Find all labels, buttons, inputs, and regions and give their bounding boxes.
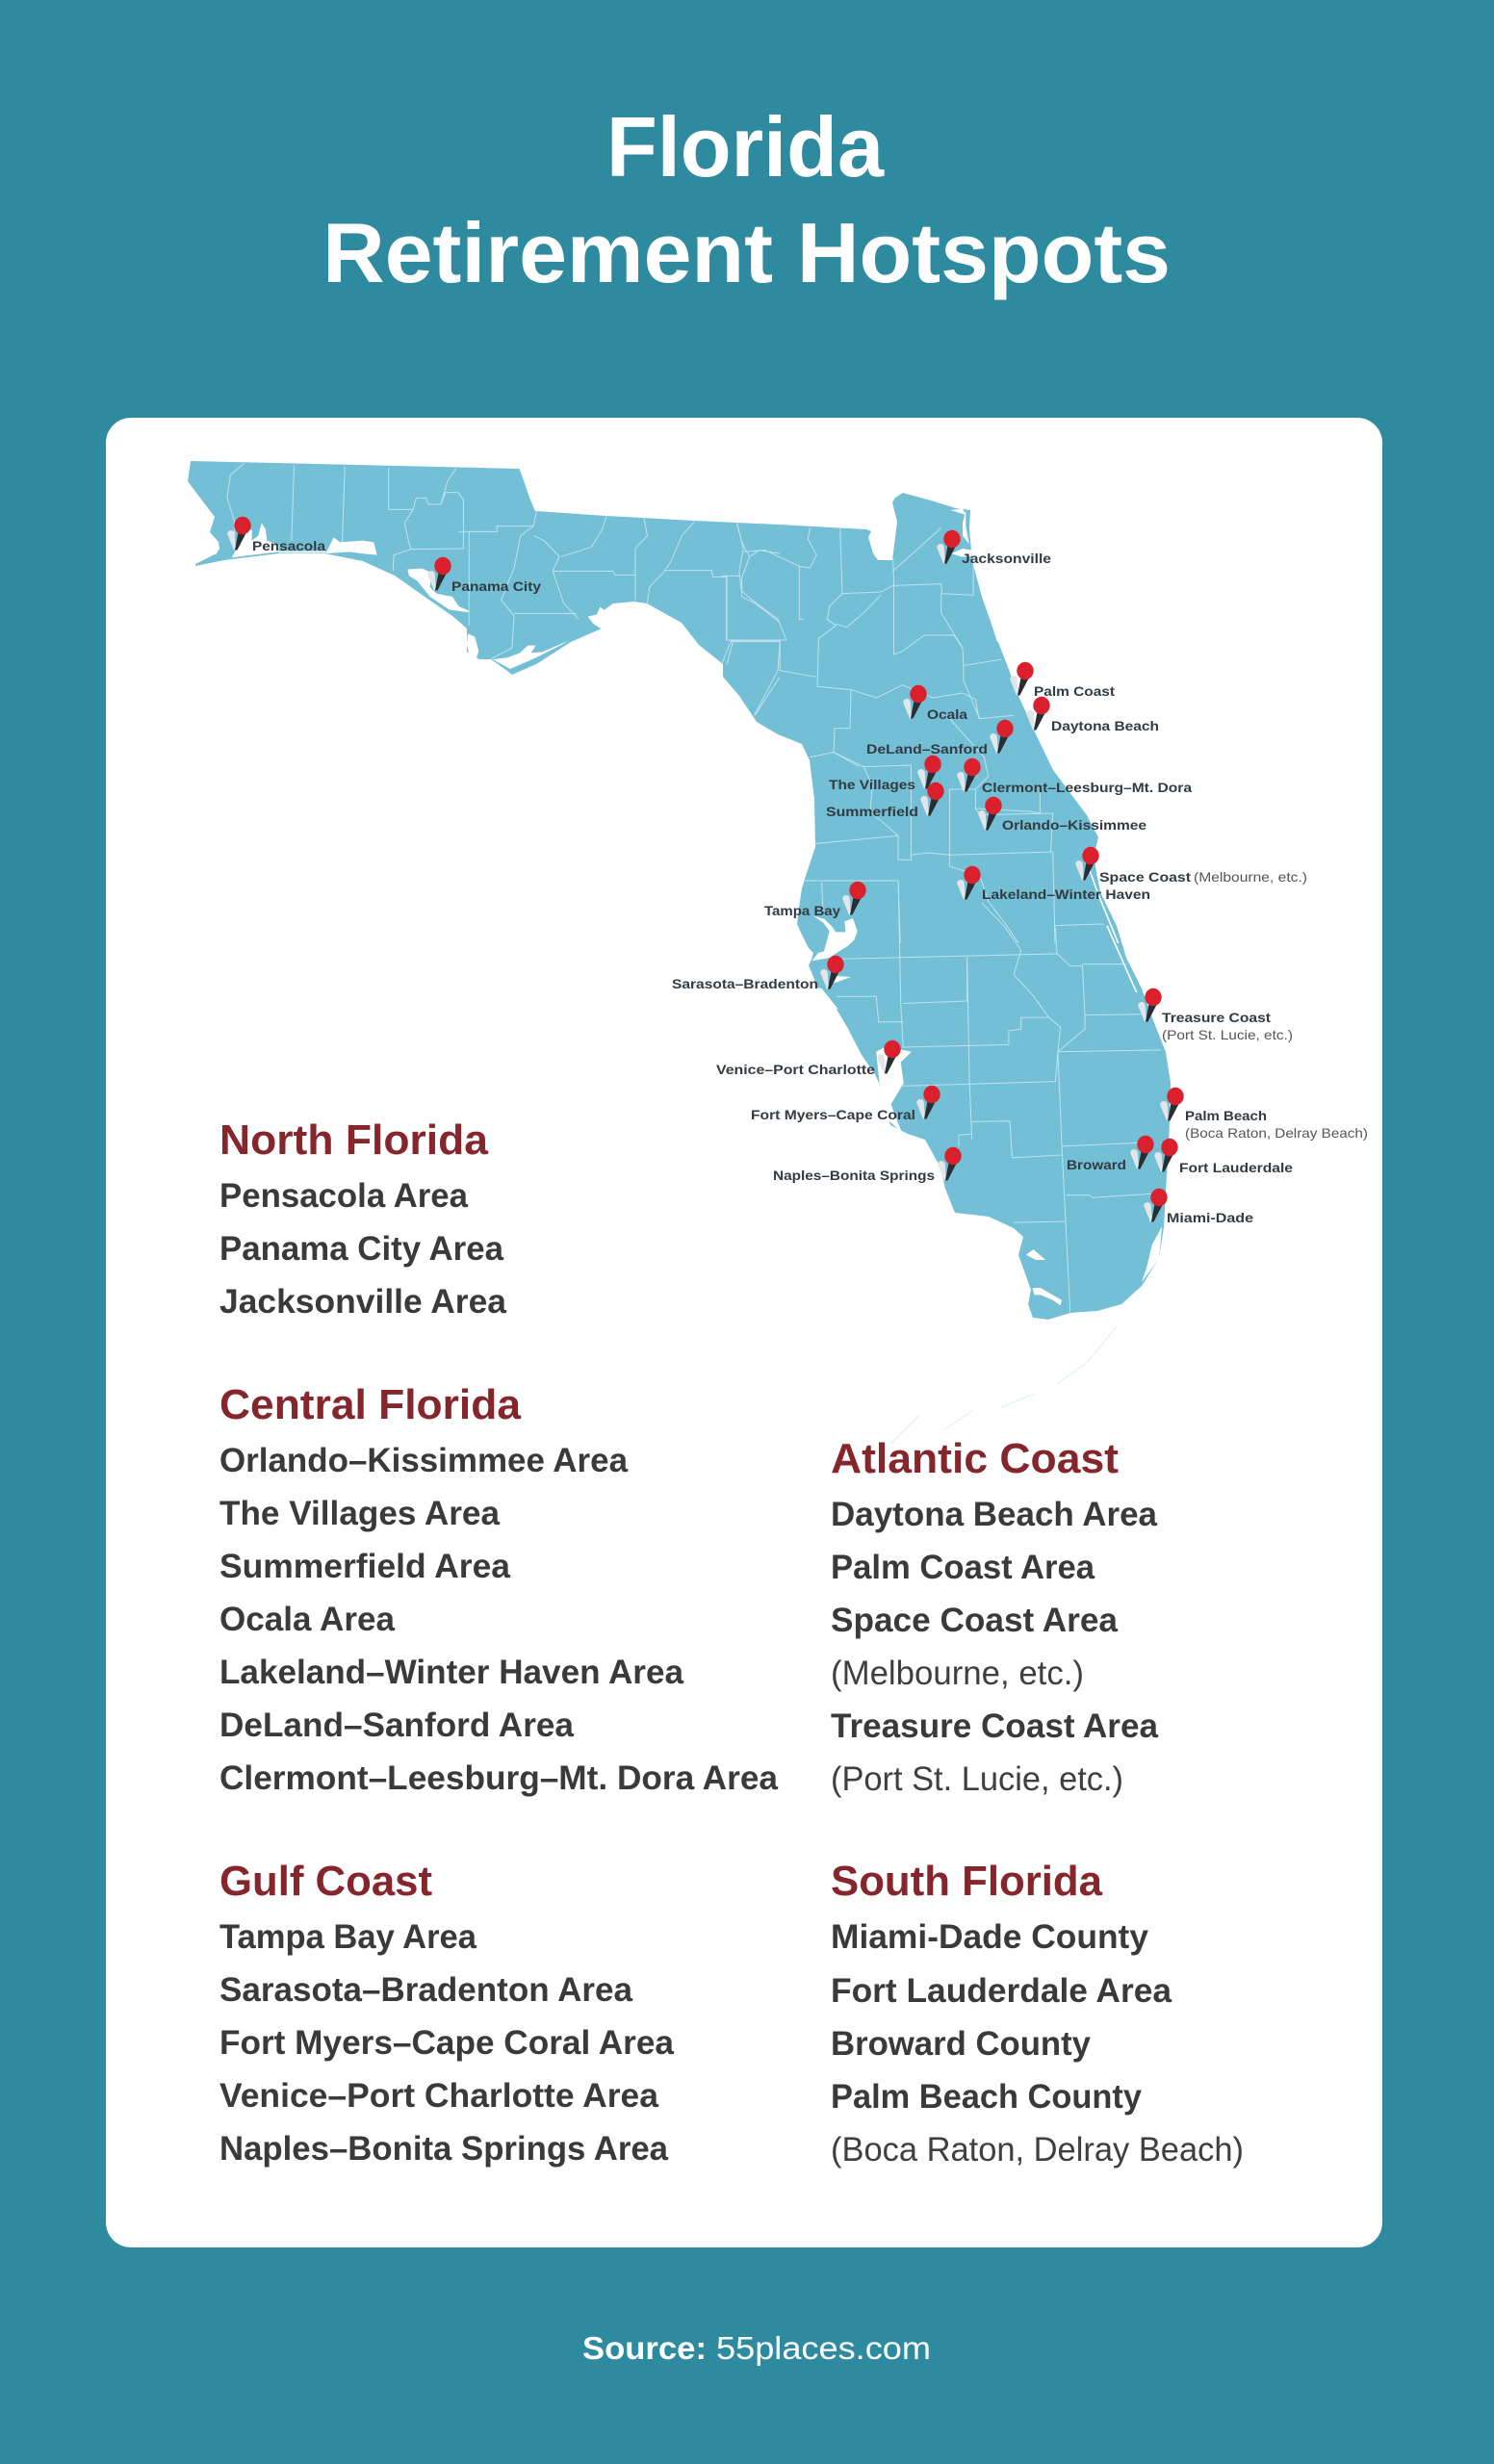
list: Central Florida: DeLand–Sanford Area [219, 1707, 575, 1744]
list: South Florida: Fort Lauderdale Area [831, 1972, 1172, 2010]
list: Atlantic Coast: Palm Coast Area [831, 1549, 1095, 1586]
list: North Florida: Pensacola Area [219, 1177, 469, 1215]
map land outline [188, 461, 1171, 1320]
map labels: (Boca Raton, Delray Beach) [1185, 1125, 1368, 1141]
map labels: Tampa Bay [764, 903, 840, 918]
map labels: Sarasota–Bradenton [672, 976, 818, 991]
list: Gulf Coast: Fort Myers–Cape Coral Area [219, 2024, 675, 2062]
map labels: Broward [1067, 1157, 1126, 1172]
list: North Florida: Jacksonville Area [219, 1283, 507, 1321]
source footer: 55places.com [716, 2330, 931, 2366]
list: Atlantic Coast: Atlantic Coast [831, 1435, 1119, 1482]
map labels [252, 538, 1368, 1225]
map labels: Ocala [927, 706, 967, 722]
title: Retirement Hotspots [322, 205, 1171, 300]
list: Gulf Coast: Naples–Bonita Springs Area [219, 2130, 669, 2168]
list: Atlantic Coast: Daytona Beach Area [831, 1496, 1158, 1533]
map labels: Treasure Coast [1162, 1010, 1271, 1025]
list: South Florida: Palm Beach County [831, 2078, 1143, 2116]
map labels: Clermont–Leesburg–Mt. Dora [982, 780, 1192, 795]
list: Central Florida: Summerfield Area [219, 1548, 511, 1585]
map labels: Pensacola [252, 538, 325, 553]
map labels: Fort Lauderdale [1179, 1160, 1293, 1175]
list: South Florida: Miami-Dade County [831, 1918, 1149, 1956]
title: Florida [606, 99, 885, 194]
list: South Florida: (Boca Raton, Delray Beach) [831, 2131, 1244, 2169]
map labels: Orlando–Kissimmee [1002, 817, 1146, 833]
source footer: Source: [582, 2330, 707, 2366]
title [322, 99, 1171, 300]
list: South Florida: South Florida [831, 1858, 1103, 1905]
map labels: Space Coast [1099, 869, 1191, 885]
map labels: Lakeland–Winter Haven [982, 886, 1150, 902]
map labels: Summerfield [826, 804, 918, 819]
list: Central Florida: Central Florida [219, 1381, 522, 1428]
bay: Tampa [811, 916, 858, 1009]
list: Gulf Coast: Gulf Coast [219, 1858, 432, 1905]
map labels: Palm Beach [1185, 1108, 1267, 1123]
list: Atlantic Coast [831, 1435, 1159, 1798]
list: North Florida [219, 1116, 507, 1321]
map labels: Daytona Beach [1051, 718, 1159, 733]
map labels: (Melbourne, etc.) [1194, 869, 1307, 885]
list: Gulf Coast: Tampa Bay Area [219, 1918, 477, 1956]
list: Central Florida: Clermont–Leesburg–Mt. Dora Area [219, 1759, 779, 1797]
map labels: DeLand–Sanford [866, 741, 988, 757]
list: Atlantic Coast: Treasure Coast Area [831, 1707, 1159, 1745]
map labels: The Villages [829, 777, 915, 792]
county borders [227, 464, 1161, 1313]
map labels: Venice–Port Charlotte [716, 1062, 875, 1077]
bays: south Florida [876, 1046, 1162, 1305]
map labels: Palm Coast [1034, 683, 1115, 699]
map labels: Fort Myers–Cape Coral [751, 1107, 915, 1122]
map labels: (Port St. Lucie, etc.) [1162, 1027, 1293, 1042]
map labels: Panama City [451, 578, 541, 594]
bays: panhandle [232, 523, 604, 669]
list: Atlantic Coast: Space Coast Area [831, 1602, 1119, 1639]
list: Central Florida: The Villages Area [219, 1495, 501, 1532]
list: Gulf Coast: Sarasota–Bradenton Area [219, 1971, 633, 2009]
bay: Jacksonville [950, 508, 972, 556]
list: Central Florida [219, 1381, 779, 1797]
map labels: Miami-Dade [1167, 1210, 1253, 1225]
pins [227, 517, 1184, 1222]
list: North Florida: Panama City Area [219, 1230, 504, 1268]
list: South Florida: Broward County [831, 2025, 1092, 2063]
list: Atlantic Coast: (Port St. Lucie, etc.) [831, 1760, 1123, 1798]
map labels: Naples–Bonita Springs [773, 1168, 935, 1183]
list: Central Florida: Lakeland–Winter Haven Area [219, 1654, 684, 1691]
panel: white card [106, 418, 1382, 2247]
list: South Florida [831, 1858, 1244, 2169]
list: Central Florida: Ocala Area [219, 1601, 396, 1638]
florida keys [890, 1326, 1117, 1444]
list: Gulf Coast [219, 1858, 675, 2168]
map labels: Jacksonville [962, 551, 1051, 566]
list: Gulf Coast: Venice–Port Charlotte Area [219, 2077, 659, 2115]
source footer [582, 2330, 931, 2366]
map: Florida [188, 461, 1368, 1444]
list: Central Florida: Orlando–Kissimmee Area [219, 1442, 629, 1479]
list: North Florida: North Florida [219, 1116, 489, 1164]
lagoons [984, 597, 1137, 992]
list: Atlantic Coast: (Melbourne, etc.) [831, 1655, 1084, 1692]
